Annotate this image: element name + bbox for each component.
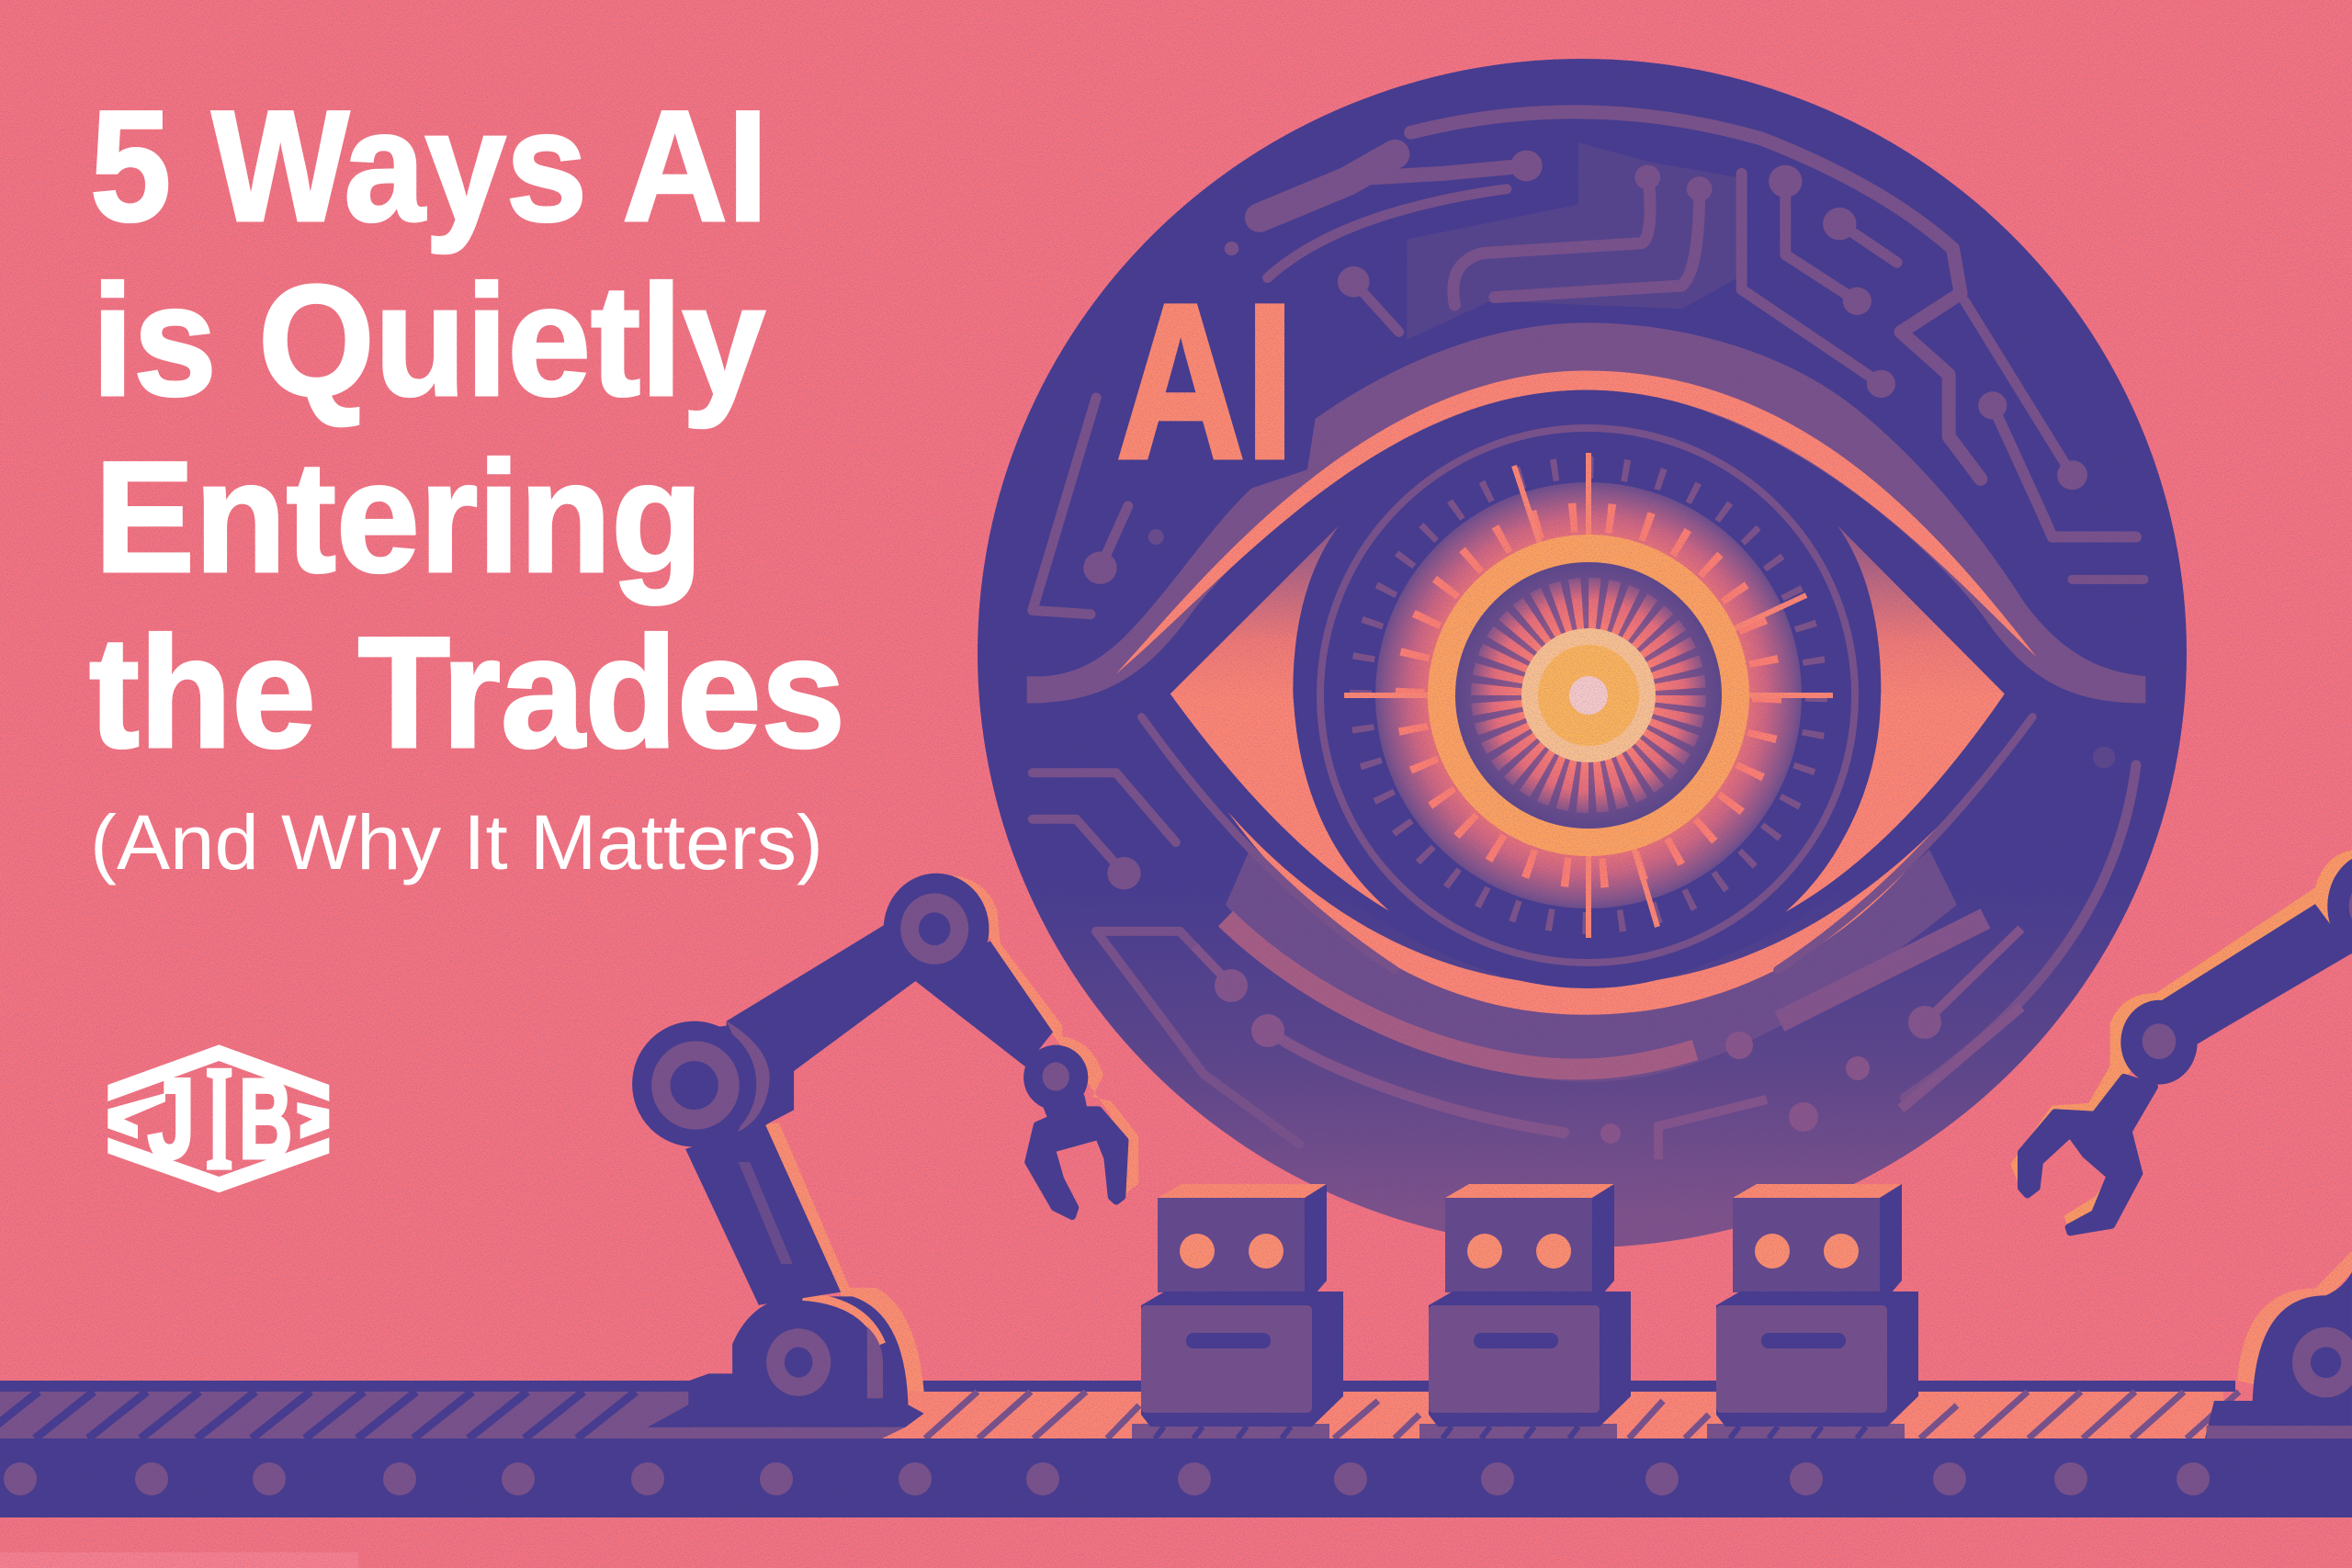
right robot arm xyxy=(2010,851,2352,1438)
robot 2 xyxy=(1419,1184,1631,1438)
base highlight xyxy=(803,1296,882,1344)
subtitle: (And Why It Matters) xyxy=(90,799,823,886)
logo left bracket xyxy=(107,1093,165,1139)
logo letters xyxy=(148,1035,292,1201)
iris glow xyxy=(1375,482,1802,908)
conveyor mauve left strip xyxy=(0,1392,691,1438)
gripper xyxy=(1028,1097,1125,1216)
forearm xyxy=(914,941,1053,1066)
right slashes xyxy=(925,1392,2239,1438)
wrist xyxy=(2120,1000,2198,1085)
lower lid lines xyxy=(1142,717,2032,970)
sclera xyxy=(1170,525,2005,912)
wrist xyxy=(1023,1045,1088,1110)
conveyor band xyxy=(0,1438,2352,1517)
logo xyxy=(107,1035,329,1201)
illustration: AI eye sphere xyxy=(978,59,2187,1247)
bottom left lighter strip xyxy=(0,1552,358,1568)
robot 3 xyxy=(1707,1184,1918,1438)
conveyor rail xyxy=(0,1381,2235,1392)
shoulder joint xyxy=(671,1025,794,1134)
robot 1 xyxy=(1132,1184,1343,1438)
pupil light ring xyxy=(1521,628,1656,762)
title line 3: Entering xyxy=(95,429,703,605)
brow xyxy=(1027,322,2145,704)
iris xyxy=(1295,402,1881,988)
base highlight xyxy=(2237,1251,2352,1384)
upper arm xyxy=(2162,904,2352,1047)
arm highlight xyxy=(2010,851,2352,1183)
logo letters: I xyxy=(205,1035,233,1201)
AI label: AI xyxy=(1116,258,1295,504)
lower arm xyxy=(685,1123,841,1305)
elbow joint xyxy=(884,874,989,985)
logo right bracket xyxy=(297,1102,329,1139)
lower band xyxy=(1226,850,1957,1082)
arm highlight xyxy=(952,875,1138,1197)
outer ticks xyxy=(1361,468,1816,923)
logo bottom chevron xyxy=(107,1137,329,1192)
upper arm xyxy=(724,919,941,1125)
base xyxy=(2205,1272,2352,1438)
title line 2: is Quietly xyxy=(92,253,765,429)
lower traces xyxy=(1194,919,2021,1159)
left slashes xyxy=(0,1392,636,1438)
inner ticks xyxy=(1410,517,1767,874)
title xyxy=(89,78,845,781)
conveyor dots xyxy=(4,1462,2210,1495)
circuit traces xyxy=(1033,112,2144,1144)
orange ring xyxy=(1442,548,1736,842)
title line 4: the Trades xyxy=(89,604,845,781)
base foot xyxy=(630,1427,905,1438)
pupil centre xyxy=(1569,676,1608,715)
sphere body xyxy=(978,59,2187,1247)
gripper xyxy=(2021,1077,2154,1232)
eye dark band xyxy=(1128,390,2044,986)
lower lid stripe xyxy=(1227,811,1952,1015)
conveyor xyxy=(0,1381,2352,1517)
inner rays xyxy=(1497,604,1680,787)
title line 1: 5 Ways AI xyxy=(90,78,768,254)
base strip xyxy=(2207,1426,2352,1438)
base joint xyxy=(766,1328,831,1396)
shoulder joint xyxy=(2327,852,2352,960)
left robot arm xyxy=(630,874,1138,1438)
conveyor salmon strip xyxy=(882,1392,2223,1438)
base joint xyxy=(2292,1327,2352,1397)
logo letters: B xyxy=(239,1056,292,1183)
pupil yellow xyxy=(1538,645,1639,746)
upper lid stripe xyxy=(1116,371,2037,674)
logo top chevron xyxy=(107,1044,329,1101)
long spikes xyxy=(1344,453,1833,938)
logo letters: J xyxy=(148,1056,195,1183)
